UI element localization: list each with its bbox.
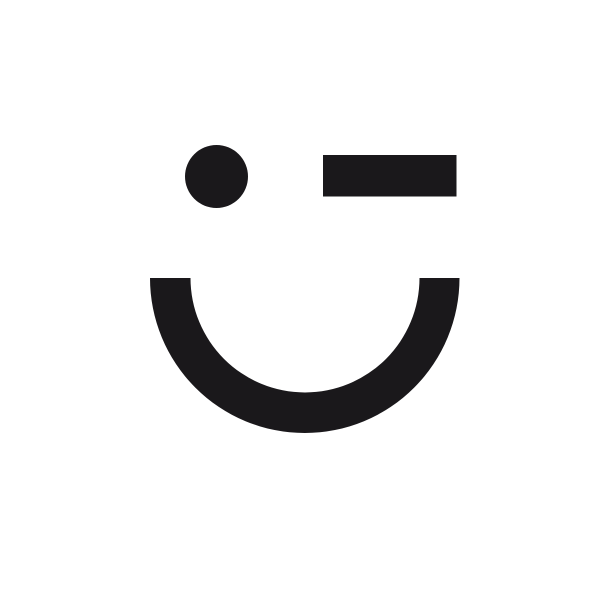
icon: smile arc: [150, 278, 460, 433]
icon: left eye dot: [185, 145, 248, 208]
icon: right eye wink bar: [323, 155, 456, 196]
